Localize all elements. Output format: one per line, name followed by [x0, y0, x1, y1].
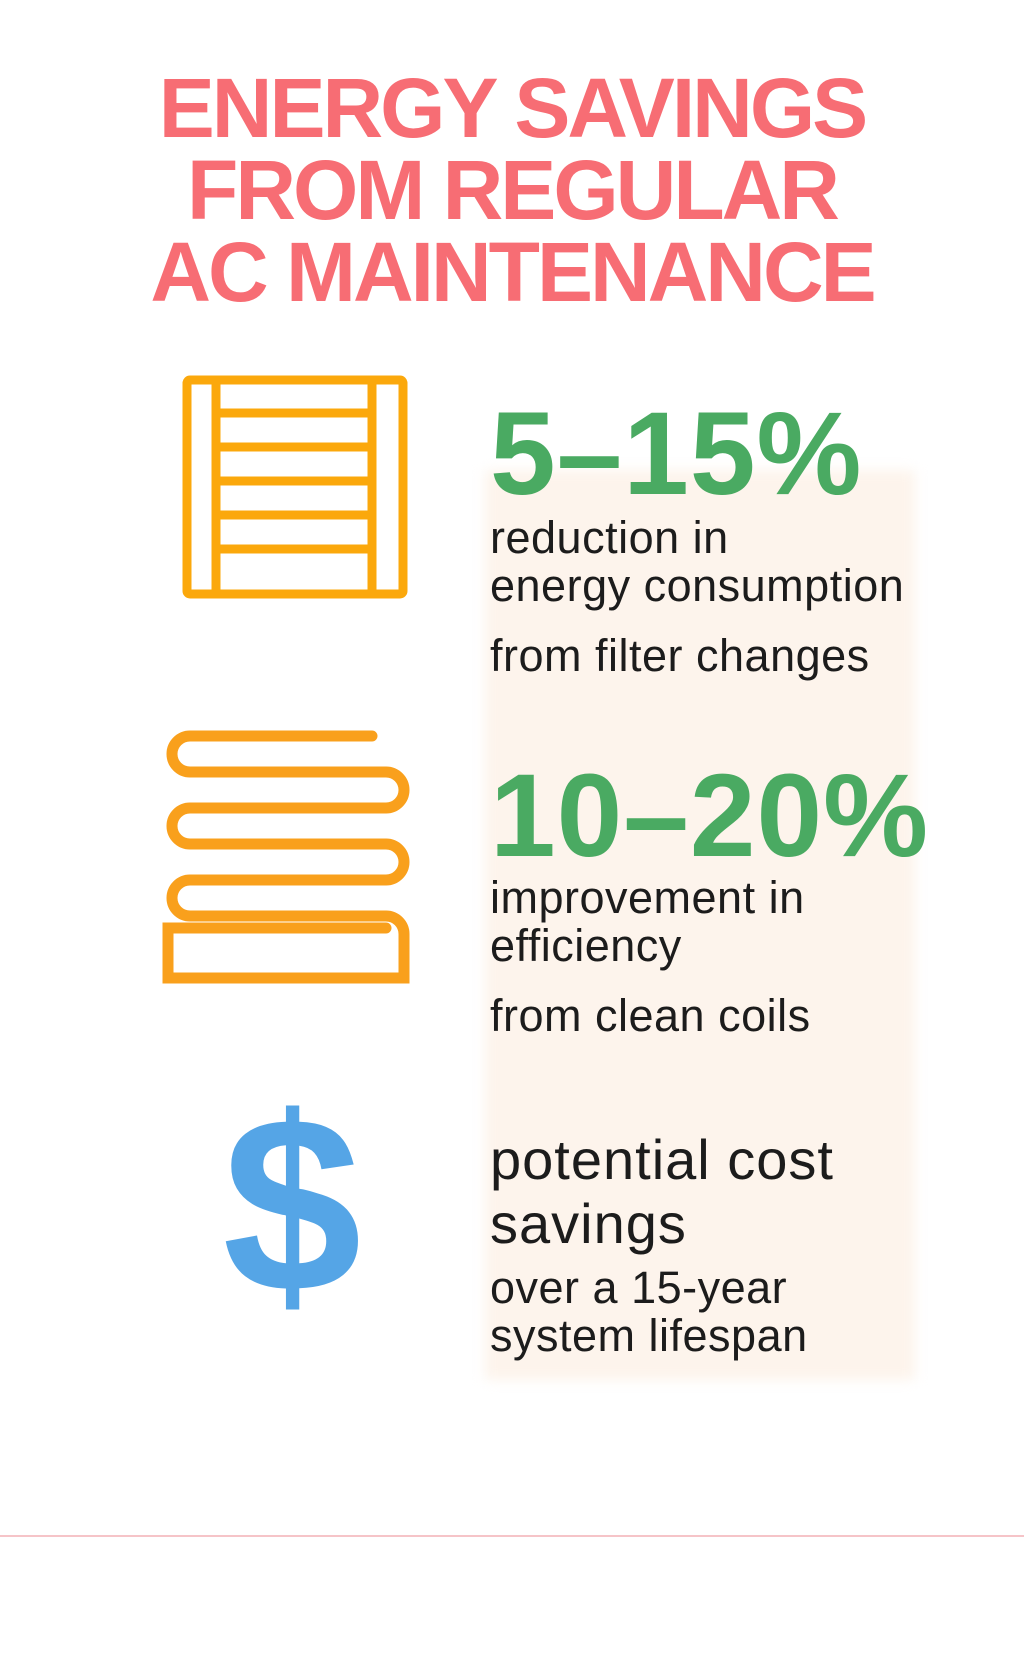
title: AC MAINTENANCE [150, 225, 874, 319]
stat: filter changes: energy consumption [490, 560, 904, 611]
stat: filter changes: reduction in [490, 512, 729, 563]
stat: filter changes: from filter changes [490, 630, 870, 681]
stat: filter changes: 5–15% [490, 388, 862, 520]
icon: coil [162, 730, 410, 984]
icon: dollar sign: $ [222, 1065, 362, 1344]
stat: clean coils: 10–20% [490, 750, 929, 882]
stat: cost savings: potential cost [490, 1128, 834, 1191]
background panel behind stats [485, 470, 915, 1380]
stat: clean coils [490, 750, 929, 1041]
stat: clean coils: from clean coils [490, 990, 811, 1041]
title [150, 61, 874, 319]
stat: filter changes [490, 388, 904, 681]
stat: clean coils: efficiency [490, 920, 682, 971]
title: FROM REGULAR [187, 143, 837, 237]
stat: cost savings: system lifespan [490, 1310, 808, 1361]
stat: cost savings: savings [490, 1192, 687, 1255]
stat: cost savings: over a 15-year [490, 1262, 787, 1313]
stat: clean coils: improvement in [490, 872, 805, 923]
icon: air filter [182, 376, 408, 598]
title: ENERGY SAVINGS [159, 61, 865, 155]
stat: cost savings [490, 1128, 834, 1361]
